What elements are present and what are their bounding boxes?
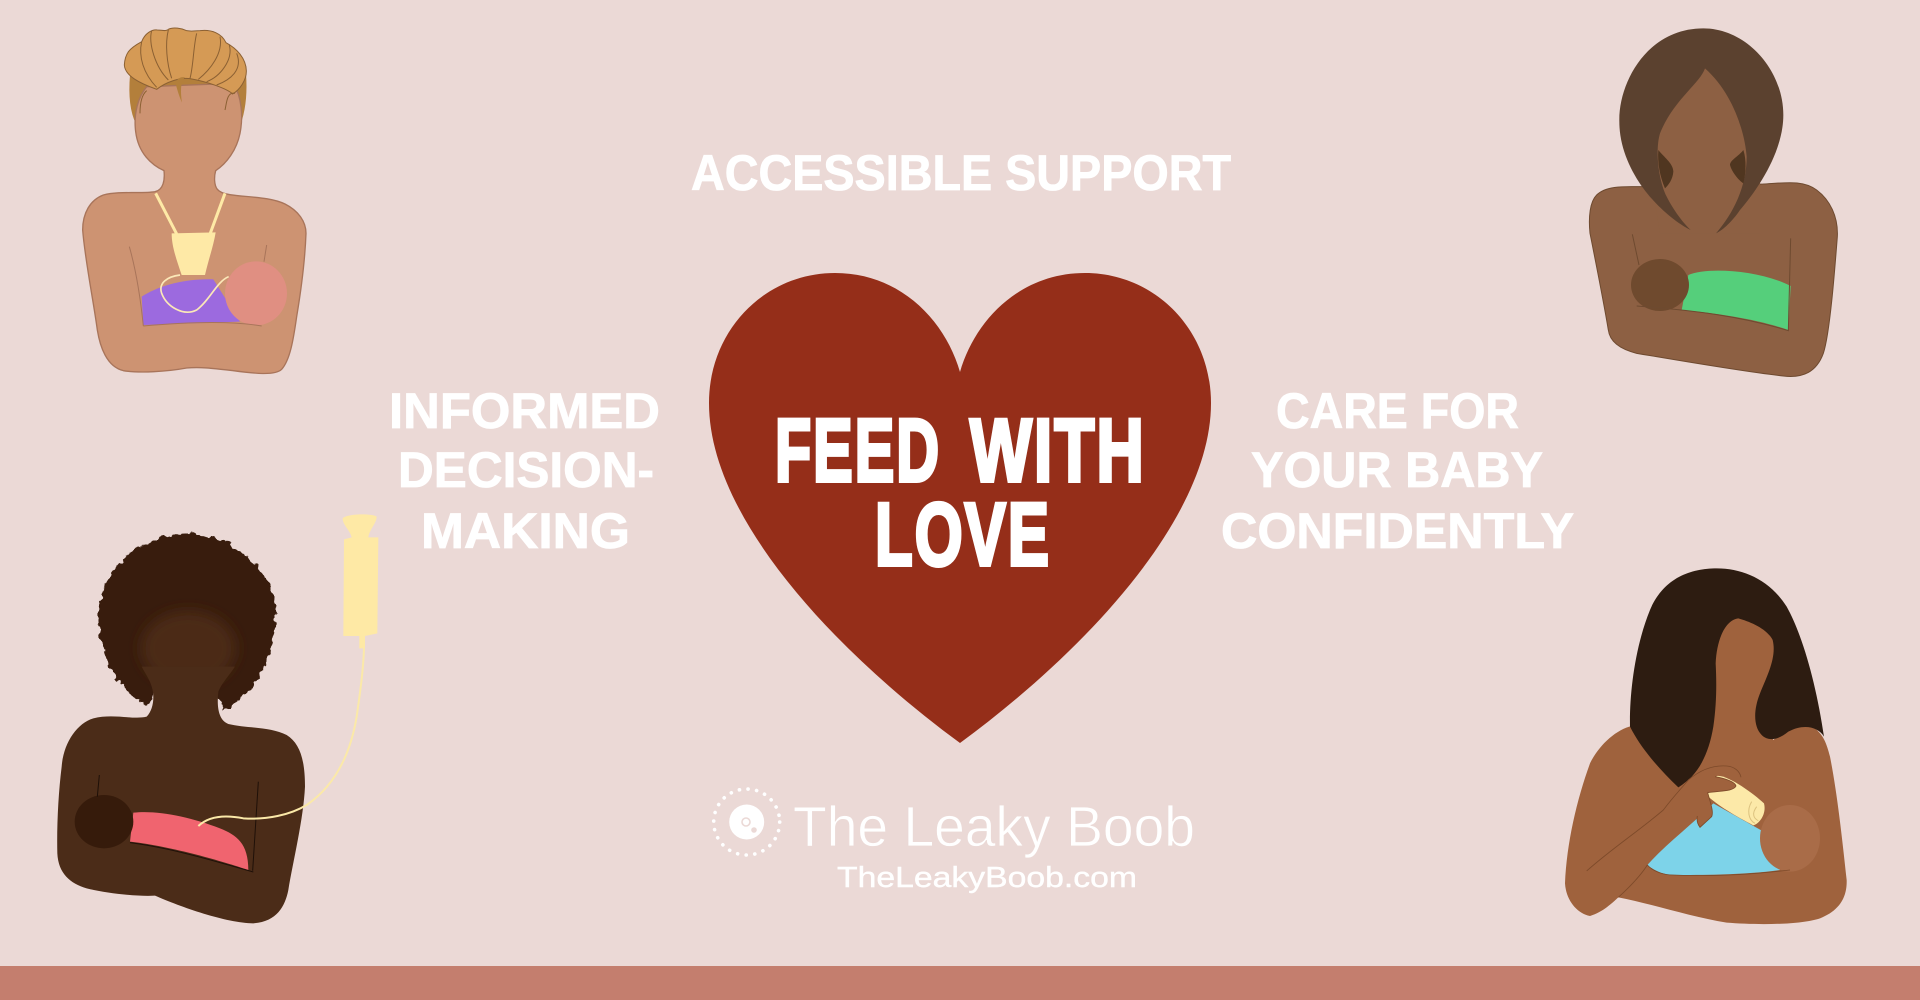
title: WITH: [970, 400, 1146, 500]
inner hair shadow: [1658, 150, 1746, 188]
arm lines: [129, 245, 267, 326]
body: [1565, 700, 1847, 924]
icon: feeding bottle: [1707, 776, 1765, 825]
wordmark: The Leaky Boob: [793, 795, 1195, 859]
heart shape: [709, 273, 1211, 743]
body: [57, 667, 305, 923]
illustration: woman with updo using supplemental tube: [83, 28, 306, 374]
hair: [1630, 568, 1824, 787]
title: [775, 400, 1146, 584]
arm lines: [1587, 766, 1790, 897]
hair updo: [124, 28, 246, 113]
illustration: woman with long hair bottle feeding: [1565, 568, 1847, 924]
text block: care for your baby confidently: [1221, 383, 1574, 559]
hand holding bottle: [1672, 765, 1741, 830]
icon: dotted circle emblem: [714, 789, 780, 855]
blue baby blanket: [1647, 803, 1780, 875]
feeding tube: [161, 275, 229, 312]
face and neck: [1643, 63, 1760, 233]
baby head: [1760, 805, 1820, 872]
logo: The Leaky Boob: [714, 789, 1195, 894]
pink baby blanket: [130, 812, 248, 870]
illustration: woman with bob haircut nursing: [1589, 28, 1837, 376]
face and neck: [1707, 610, 1780, 723]
purple baby blanket: [142, 279, 240, 325]
yellow top: [156, 193, 225, 275]
heading: accessible support: ACCESSIBLE SUPPORT: [691, 145, 1231, 201]
text block: informed decision-making: MAKING: [421, 503, 630, 559]
text block: informed decision-making: INFORMED: [389, 383, 660, 439]
baby head: [225, 261, 287, 325]
hair: [1619, 28, 1783, 233]
text block: informed decision-making: [389, 383, 660, 559]
body: [1589, 183, 1837, 376]
icon: milk bottle: [343, 514, 378, 648]
feeding tube: [198, 648, 364, 826]
text block: care for your baby confidently: CONFIDENTLY: [1221, 503, 1574, 559]
bottom bar: [0, 966, 1920, 1000]
baby head: [1631, 259, 1689, 311]
green baby blanket: [1682, 271, 1791, 330]
heart with title: [709, 273, 1211, 743]
afro hair: [98, 534, 276, 711]
skin and body: [83, 83, 306, 374]
back hair: [129, 73, 246, 124]
text block: informed decision-making: DECISION-: [398, 442, 654, 498]
title: LOVE: [875, 484, 1051, 584]
title: FEED: [775, 400, 941, 500]
text block: care for your baby confidently: YOUR BABY: [1251, 442, 1543, 498]
arm lines: [1632, 234, 1791, 331]
illustration: woman with afro using supplemental nursing system: [57, 514, 378, 923]
baby head: [75, 795, 133, 848]
text block: care for your baby confidently: CARE FOR: [1276, 383, 1519, 439]
arm lines: [97, 775, 258, 872]
website url: TheLeakyBoob.com: [837, 862, 1137, 894]
face glow: [141, 611, 236, 686]
